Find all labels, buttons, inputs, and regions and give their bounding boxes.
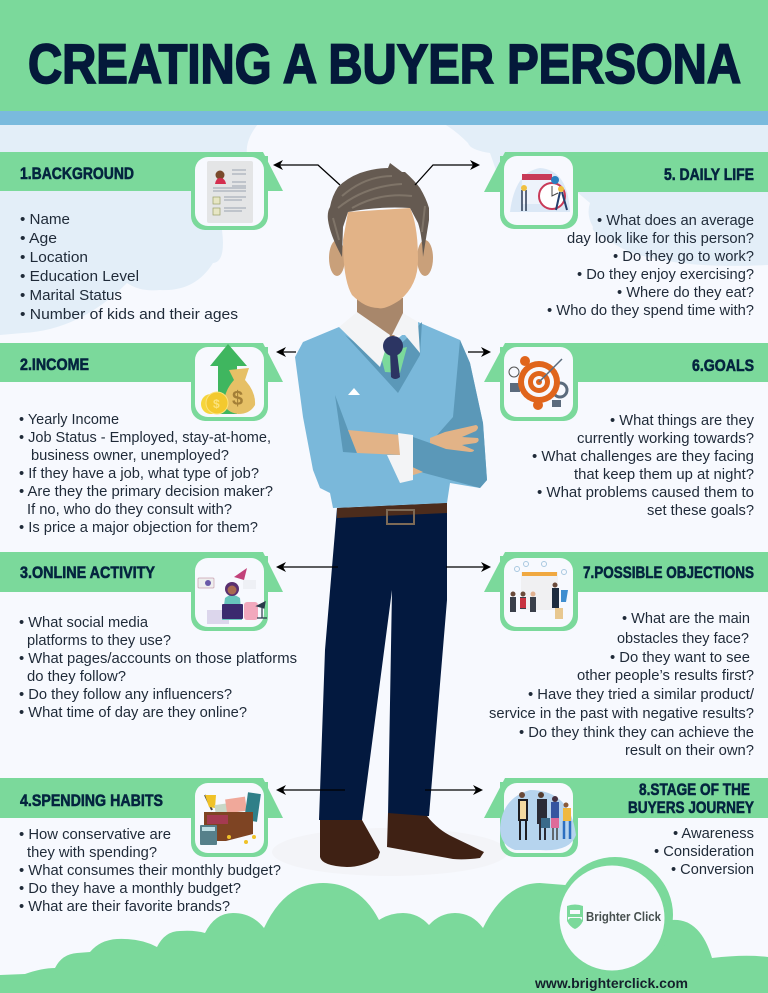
bullet list: • Education Level: [20, 269, 139, 285]
icon: woman with laptop: [198, 568, 267, 624]
website url: www.brighterclick.com: [534, 975, 688, 991]
bullet list: • Where do they eat?: [617, 285, 754, 301]
bullet list: • Consideration: [654, 844, 754, 860]
bullet list: result on their own?: [625, 743, 754, 759]
panel: background: [0, 152, 283, 323]
bullet list: • What social media: [19, 615, 149, 631]
bullet list: • What challenges are they facing: [532, 449, 754, 465]
arrows from person to panels: [273, 160, 491, 795]
bullet list: [19, 412, 273, 536]
bullet list: [547, 213, 754, 319]
bullet list: • What consumes their monthly budget?: [19, 863, 281, 879]
bullet list: obstacles they face?: [617, 631, 749, 647]
bullet list: • Do they have a monthly budget?: [19, 881, 241, 897]
bullet list: • Who do they spend time with?: [547, 303, 754, 319]
heading: 6.GOALS: [692, 356, 754, 375]
icon: resume: [207, 161, 253, 223]
bullet list: • What are their favorite brands?: [19, 899, 230, 915]
bullet list: day look like for this person?: [567, 231, 754, 247]
panel: income: [0, 343, 283, 536]
heading: 2.INCOME: [20, 355, 89, 374]
icon: money bag and arrow: $: [213, 397, 220, 411]
bullet list: • What does an average: [597, 213, 754, 229]
bullet list: platforms to they use?: [27, 633, 171, 649]
bullet list: • What time of day are they online?: [19, 705, 247, 721]
icon: money bag and arrow: [201, 344, 255, 414]
bullet list: • Conversion: [671, 862, 754, 878]
icon: target: [509, 356, 567, 410]
icon: group of people: [500, 790, 576, 850]
bullet list: • If they have a job, what type of job?: [19, 466, 259, 482]
bullet list: • What problems caused them to: [537, 485, 754, 501]
person figure: [272, 163, 508, 876]
bullet list: • Marital Status: [20, 288, 122, 304]
bullet list: that keep them up at night?: [574, 467, 754, 483]
bullet list: • Age: [20, 231, 57, 247]
bullet list: • Awareness: [673, 826, 754, 842]
bullet list: • What are the main: [622, 611, 750, 627]
heading: 3.ONLINE ACTIVITY: [20, 563, 156, 582]
bullet list: • Number of kids and their ages: [20, 307, 238, 323]
bullet list: currently working towards?: [577, 431, 754, 447]
icon: money bag and arrow: $: [232, 388, 243, 410]
bottom cloud footer: [0, 857, 768, 993]
bullet list: • Have they tried a similar product/: [528, 687, 755, 703]
panel: daily life: [484, 152, 768, 319]
bullet list: • Do they think they can achieve the: [519, 725, 754, 741]
bullet list: [20, 212, 238, 323]
icon: logo shield: [567, 904, 583, 929]
panel: goals: [484, 343, 768, 519]
header banner: [0, 0, 768, 125]
panel: online activity: [0, 552, 297, 721]
bullet list: they with spending?: [27, 845, 157, 861]
bullet list: If no, who do they consult with?: [27, 502, 232, 518]
bullet list: • Do they want to see: [610, 650, 750, 666]
bullet list: • Location: [20, 250, 88, 266]
panel: stage of the buyers journey: [484, 778, 768, 878]
bullet list: [532, 413, 755, 519]
bullet list: • Is price a major objection for them?: [19, 520, 258, 536]
bullet list: other people’s results first?: [577, 668, 754, 684]
bullet list: service in the past with negative results?: [489, 706, 754, 722]
icon: wallet: [200, 792, 261, 845]
logo circle: [557, 857, 673, 973]
panel: spending habits: [0, 778, 283, 915]
bullet list: [489, 611, 755, 759]
icon: calendar and clock: [510, 168, 570, 212]
bullet list: [654, 826, 754, 878]
heading: 4.SPENDING HABITS: [20, 791, 163, 810]
bullet list: [19, 615, 297, 721]
heading: [628, 780, 755, 817]
bullet list: • What things are they: [610, 413, 755, 429]
bullet list: • How conservative are: [19, 827, 171, 843]
bullet list: • What pages/accounts on those platforms: [19, 651, 297, 667]
bullet list: • Yearly Income: [19, 412, 119, 428]
bullet list: • Do they follow any influencers?: [19, 687, 232, 703]
bullet list: [19, 827, 281, 915]
bullet list: • Do they enjoy exercising?: [577, 267, 754, 283]
bullet list: • Name: [20, 212, 70, 228]
logo wordmark: Brighter Click: [586, 909, 662, 924]
bullet list: do they follow?: [27, 669, 126, 685]
bullet list: • Job Status - Employed, stay-at-home,: [19, 430, 271, 446]
bullet list: • Are they the primary decision maker?: [19, 484, 273, 500]
panel: possible objections: [484, 552, 768, 759]
bullet list: set these goals?: [647, 503, 754, 519]
icon: team at board: [510, 562, 568, 619]
bullet list: • Do they go to work?: [613, 249, 754, 265]
heading: 1.BACKGROUND: [20, 164, 134, 183]
bullet list: business owner, unemployed?: [31, 448, 229, 464]
